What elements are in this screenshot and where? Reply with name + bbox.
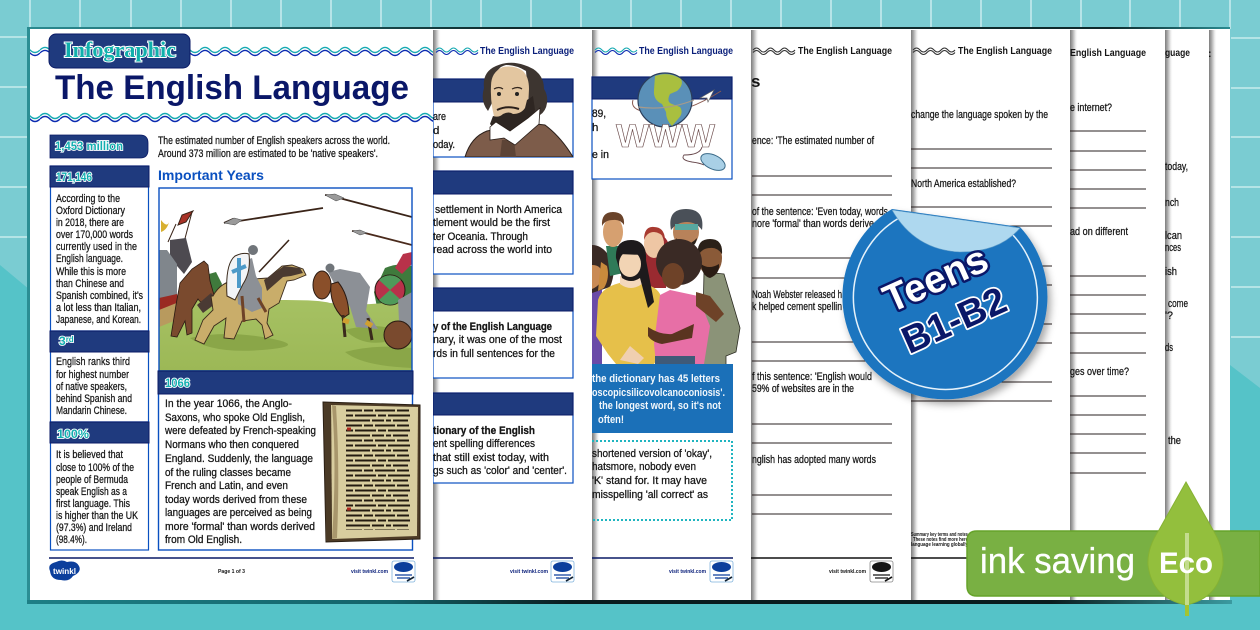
panel: page 4 worksheet: 59% of websites are in the: [752, 383, 854, 395]
panel: page 7 worksheet fragment: ds: [1165, 342, 1173, 354]
panel: page 5 worksheet: [911, 30, 1052, 600]
heading: Important Years: Important Years: [158, 168, 264, 183]
stat box: 3rd: behind Spanish and: [56, 393, 132, 405]
illustration: group of people: [592, 209, 740, 365]
stat box: 171,146: a lot less than Italian,: [56, 302, 141, 314]
year box: North America: read across the world into: [433, 244, 552, 256]
panel: page 7 worksheet fragment: ish: [1165, 266, 1177, 278]
fact box: internet: e in: [592, 149, 609, 161]
year box: Shakespeare: oday.: [433, 139, 455, 151]
panel: page 5 worksheet: language learning globally: [911, 542, 968, 548]
panel: page 6 worksheet: ges over time?: [1070, 366, 1129, 378]
year box: North America: tlement would be the first: [433, 217, 551, 229]
intro text: Around 373 million are estimated to be 'native speakers'.: [158, 148, 378, 160]
callout: okay dotted box: hatsmore, nobody even: [592, 461, 696, 473]
panel: page 2 timeline: [433, 30, 574, 600]
panel: page 7 worksheet fragment: guage: [1165, 47, 1190, 59]
page footer: visit twinkl.com: [669, 569, 706, 575]
level text: Teens: [877, 237, 995, 321]
year box: 1066: were defeated by French-speaking: [164, 425, 316, 437]
stat box: 3rd: rd: [66, 335, 74, 344]
illustration: Battle of Hastings: [159, 188, 412, 371]
year box: Shakespeare: [433, 79, 573, 157]
panel: page 7 worksheet fragment: the: [1168, 435, 1181, 447]
badge: Infographic: Infographic: [64, 37, 176, 62]
year box: North America: [433, 171, 573, 274]
level text: [877, 237, 1013, 363]
fact box: internet: 89,: [592, 108, 606, 120]
panel: page 8 edge: [1208, 30, 1217, 600]
year box: 1066: today words derived from these: [165, 494, 307, 506]
year box: dictionary of the English language: y of the English Language: [433, 321, 552, 333]
stat box: 171,146: While this is more: [56, 266, 126, 278]
stat box: 3rd: Mandarin Chinese.: [56, 405, 127, 417]
stat label: 1,453 million: 1,453 million: [55, 139, 123, 153]
stat box: 3rd: [50, 331, 149, 422]
stat box: 100%: first language. This: [56, 498, 130, 510]
page header: The English Language: [480, 45, 574, 57]
year box: American dictionary: that still exist today, with: [433, 452, 549, 464]
lower wave divider: [30, 112, 433, 123]
callout: okay dotted box: 'K' stand for. It may have: [592, 475, 707, 487]
stat box: 100%: close to 100% of the: [56, 462, 134, 474]
icon: green leaf drop: [1148, 482, 1223, 616]
callout: longest word: often!: [598, 414, 624, 426]
year box: North America: ter Oceania. Through: [433, 231, 528, 243]
fact box: internet: h: [592, 122, 598, 134]
year box: American dictionary: ent spelling differences: [433, 438, 535, 450]
badge: Teens B1-B2 sticker: [842, 209, 1047, 399]
intro text: The estimated number of English speakers across the world.: [158, 135, 390, 147]
stat box: 100%: speak English as a: [56, 486, 127, 498]
year box: American dictionary: gs such as 'color' and 'center'.: [433, 465, 567, 477]
panel: page 7 worksheet fragment: '?: [1165, 310, 1173, 322]
twinkl logo: twinkl: [53, 567, 76, 576]
panel: page 5 worksheet: These notes find more here: [913, 537, 968, 543]
stat box: 171,146: Spanish combined, it's: [56, 290, 143, 302]
year box: 1066: languages are perceived as being: [165, 507, 312, 519]
page footer: [49, 558, 415, 582]
callout: longest word: the longest word, so it's not: [599, 400, 721, 412]
panel: page 4 worksheet: f this sentence: 'English would: [752, 371, 872, 383]
year box: North America: settlement in North America: [435, 204, 563, 216]
callout: longest word: oscopicsilicovolcanoconiosis'.: [592, 387, 725, 399]
page header: The English Language: [639, 45, 733, 57]
page footer: visit twinkl.com: [351, 569, 388, 575]
panel: page 7 worksheet fragment: come: [1168, 298, 1188, 310]
year box: 1066: Saxons, who spoke Old English,: [165, 412, 305, 424]
panel: page 5 worksheet: Summary key terms and notes: [911, 532, 968, 538]
panel: page 7 worksheet fragment: nch: [1165, 197, 1179, 209]
panel: page 8 edge: :: [1208, 48, 1212, 60]
callout: longest word: the dictionary has 45 letters: [592, 373, 720, 385]
icon: globe with WWW and mouse: [616, 73, 728, 174]
stat box: 171,146: English language.: [56, 253, 123, 265]
stat label: 1,453 million: [50, 135, 148, 158]
stat box: 171,146: than Chinese and: [56, 278, 124, 290]
panel: page 4 worksheet: of the sentence: 'Even today, words: [752, 206, 888, 218]
year box: 1066: 1066: [165, 376, 190, 390]
year box: dictionary of the English language: [433, 288, 573, 378]
page footer: [433, 558, 574, 582]
year box: 1066: England. Suddenly, the language: [165, 453, 313, 465]
level text: B1-B2: [896, 279, 1013, 363]
year box: 1066: from Old English.: [165, 534, 242, 546]
panel: page 4 worksheet: s: [751, 72, 760, 91]
stat box: 100%: people of Bermuda: [56, 474, 128, 486]
stat box: 100%: [50, 422, 149, 550]
stat box: 100%: is higher than the UK: [56, 510, 138, 522]
stat box: 171,146: in 2018, there are: [56, 217, 124, 229]
title: The English Language: [55, 69, 409, 107]
year box: American dictionary: [433, 393, 573, 483]
top wave divider: [30, 46, 433, 57]
panel: page 7 worksheet fragment: nces: [1165, 242, 1181, 254]
callout: okay dotted box: misspelling 'all correct' as: [592, 489, 708, 501]
icon: globe with WWW and mouse: WWW: [616, 118, 716, 154]
callout: longest word: [592, 364, 733, 433]
panel: page 4 worksheet: Noah Webster released h: [752, 289, 842, 301]
badge: Infographic: [49, 34, 190, 68]
stat box: 171,146: Oxford Dictionary: [56, 205, 126, 217]
panel: page 5 worksheet: change the language spoken by the: [911, 109, 1048, 121]
panel: page 7 worksheet fragment: [1165, 30, 1190, 600]
stat box: 171,146: [50, 166, 149, 331]
stat box: 3rd: 3: [59, 334, 66, 348]
stat box: 171,146: currently used in the: [56, 241, 137, 253]
intro text: [158, 135, 390, 160]
page footer: visit twinkl.com: [510, 569, 548, 575]
stat box: 100%: (98.4%).: [56, 534, 87, 546]
callout: okay dotted box: [592, 441, 732, 520]
fact box: internet: [592, 77, 732, 179]
illustration: William Shakespeare portrait: [465, 63, 573, 157]
panel: page 3 facts: [592, 30, 740, 600]
year box: 1066: Normans who then conquered: [165, 439, 299, 451]
banner: ink saving Eco: Eco: [1159, 547, 1213, 580]
stat box: 100%: (97.3%) and Ireland: [56, 522, 132, 534]
panel: page 7 worksheet fragment: lcan: [1165, 230, 1182, 242]
stat box: 100%: 100%: [57, 427, 89, 441]
panel: page 6 worksheet: [1070, 30, 1146, 600]
panel: page 6 worksheet: ad on different: [1070, 226, 1128, 238]
panel: page 6 worksheet: e internet?: [1070, 102, 1112, 114]
panel: page 7 worksheet fragment: today,: [1165, 161, 1188, 173]
year box: 1066: [158, 371, 413, 550]
banner: ink saving Eco: ink saving: [980, 540, 1135, 581]
year box: 1066: of the ruling classes became: [165, 467, 291, 479]
panel: page 4 worksheet: ence: 'The estimated number of: [752, 135, 874, 147]
year box: 1066: French and Latin, and even: [165, 480, 288, 492]
year box: dictionary of the English language: nary, it was one of the most: [433, 334, 563, 346]
panel: page 4 worksheet: The English Language: [798, 45, 892, 57]
panel: page 4 worksheet: nore 'formal' than words derive: [752, 218, 874, 230]
callout: okay dotted box: shortened version of 'okay',: [592, 448, 712, 460]
panel: page 6 worksheet: English Language: [1070, 47, 1146, 59]
year box: 1066: In the year 1066, the Anglo-: [165, 398, 292, 410]
stat box: 171,146: over 170,000 words: [56, 229, 133, 241]
twinkl logo: [49, 560, 80, 580]
panel: page 5 worksheet: The English Language: [958, 45, 1052, 57]
stat box: 3rd: of native speakers,: [56, 381, 127, 393]
stat box: 171,146: Japanese, and Korean.: [56, 314, 141, 326]
panel: page 1 infographic front page: [30, 29, 433, 600]
panel: page 4 worksheet: nglish has adopted many words: [752, 454, 876, 466]
stat box: 3rd: for highest number: [56, 369, 129, 381]
stat box: 100%: It is believed that: [56, 449, 123, 461]
stat box: 3rd: English ranks third: [56, 356, 130, 368]
panel: page 4 worksheet: visit twinkl.com: [829, 569, 866, 575]
illustration: old manuscript book: [323, 402, 420, 542]
year box: Shakespeare: are: [433, 111, 446, 123]
year box: Shakespeare: d: [433, 125, 439, 137]
panel: page 4 worksheet: k helped cement spellin: [752, 301, 842, 313]
page footer: Page 1 of 3: [218, 569, 245, 575]
stat box: 171,146: According to the: [56, 193, 120, 205]
year box: 1066: more 'formal' than words derived: [165, 521, 315, 533]
panel: page 4 worksheet: [751, 30, 893, 600]
panel: page 5 worksheet: North America established?: [911, 178, 1016, 190]
stat box: 171,146: 171,146: [56, 170, 92, 184]
year box: American dictionary: tionary of the English: [433, 425, 535, 437]
banner: ink saving Eco: [967, 482, 1260, 616]
year box: dictionary of the English language: rds in full sentences for the: [433, 348, 555, 360]
page footer: [592, 558, 733, 582]
